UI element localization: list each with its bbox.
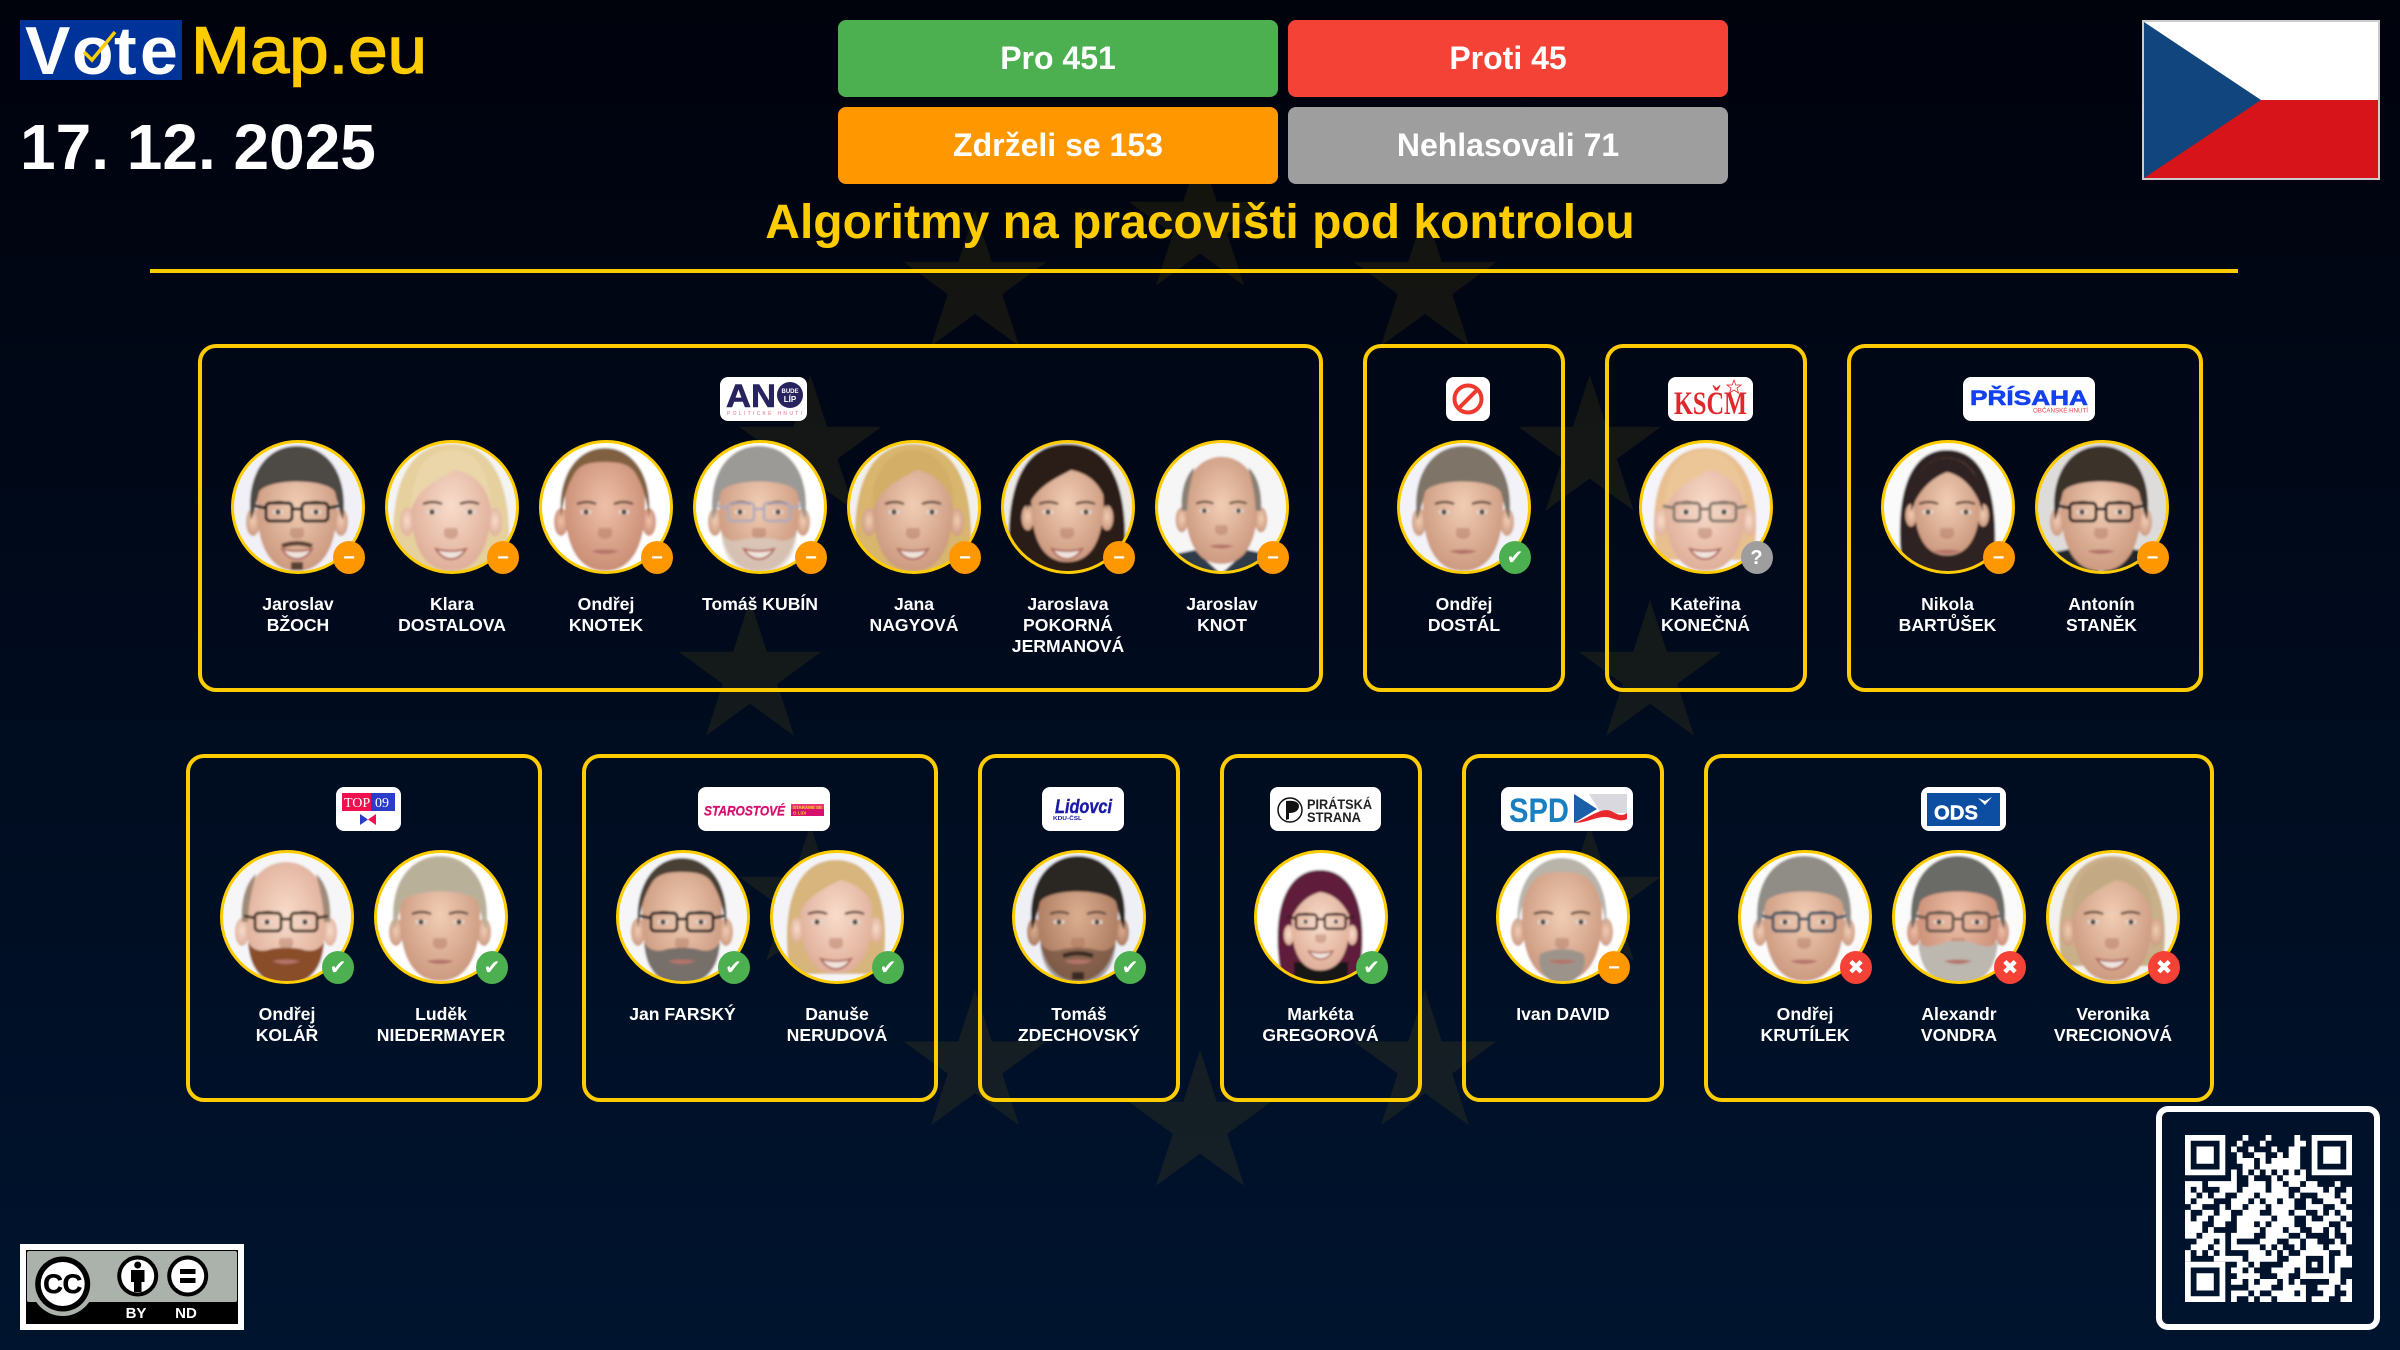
name: Antonín [2068, 594, 2135, 614]
name: Luděk [415, 1004, 467, 1024]
party logo: Lidovci: Lidovci [1055, 797, 1113, 818]
party logo: Pirátská strana: STRANA [1306, 809, 1360, 825]
vote count: not voted: Nehlasovali 71 [1397, 127, 1619, 163]
vote badge: against [1840, 951, 1872, 984]
vote badge: abstain [795, 541, 827, 574]
logo: VoteMap.eu [20, 20, 427, 89]
flag: Czech Republic [2142, 20, 2380, 180]
photo [539, 440, 673, 574]
name: Jaroslava [1027, 594, 1109, 614]
name [1761, 1004, 1850, 1045]
vote badge: abstain: − [1993, 546, 2004, 568]
party logo: TOP 09: TOP [344, 796, 370, 811]
vote count: abstained [838, 107, 1278, 184]
name: Tomáš KUBÍN [702, 594, 818, 614]
party logo: Lidovci: KDU-ČSL [1053, 815, 1083, 822]
photo [1738, 850, 1872, 984]
party logo: STAROSTOVÉ: O LIDI [793, 810, 806, 816]
party logo: ODS [1920, 787, 2006, 831]
photo [1881, 440, 2015, 574]
photo [2046, 850, 2180, 984]
person: Danuše NERUDOVÁ [770, 850, 904, 1045]
QR code [2156, 1106, 2380, 1330]
name [1018, 1004, 1140, 1045]
name: KOLÁŘ [256, 1025, 318, 1045]
vote badge: for [476, 951, 508, 984]
person: Ivan DAVID [1496, 850, 1630, 1024]
name [377, 1004, 505, 1045]
photo [385, 440, 519, 574]
party logo: Lidovci [1042, 787, 1124, 831]
name [262, 594, 334, 635]
person: Nikola BARTŮŠEK [1881, 440, 2015, 635]
name: JERMANOVÁ [1012, 636, 1124, 656]
name: VRECIONOVÁ [2054, 1025, 2172, 1045]
party logo: ANO: POLITICKÉ HNUTÍ [727, 410, 803, 417]
vote count: abstained: Zdrželi se 153 [953, 127, 1163, 163]
title divider [150, 269, 2238, 273]
party logo: ODS: ODS [1934, 802, 1977, 824]
panel: Přísaha [1847, 344, 2203, 692]
photo [1254, 850, 1388, 984]
name: DOSTALOVA [398, 615, 506, 635]
vote badge: for: ✔ [484, 956, 500, 978]
party logo: ANO: BUDE [781, 389, 799, 395]
person: Antonín STANĚK [2035, 440, 2169, 635]
name [1012, 594, 1124, 656]
photo [770, 850, 904, 984]
vote badge: for [1499, 541, 1531, 574]
name: NERUDOVÁ [787, 1025, 887, 1045]
title: Algoritmy na pracovišti pod kontrolou [765, 196, 1635, 248]
party logo: STAROSTOVÉ: STARÁME SE [793, 804, 822, 810]
person: Jan FARSKÝ [616, 850, 750, 1024]
name: NIEDERMAYER [377, 1025, 505, 1045]
panel: KSČM [1605, 344, 1807, 692]
license badge: CC BY-ND: BY [126, 1305, 146, 1322]
photo [220, 850, 354, 984]
vote count: against: Proti 45 [1449, 40, 1567, 76]
name [1899, 594, 1996, 635]
vote badge: for: ✔ [1363, 956, 1380, 978]
photo [1892, 850, 2026, 984]
vote badge: abstain: − [959, 546, 971, 568]
name: Alexandr [1921, 1004, 1997, 1024]
vote badge: for: ✔ [725, 956, 742, 978]
name [256, 1004, 318, 1045]
person: Jaroslava POKORNÁ JERMANOVÁ [1001, 440, 1135, 656]
vote badge: for: ✔ [1122, 956, 1138, 978]
party logo: Přísaha: OBČANSKÉ HNUTÍ [2033, 408, 2088, 414]
license badge: CC BY-ND: CC [43, 1269, 82, 1299]
vote badge: abstain: − [805, 546, 817, 568]
name [870, 594, 958, 635]
name: KNOT [1197, 615, 1247, 635]
vote count: for: Pro 451 [1000, 40, 1116, 76]
vote badge: abstain [949, 541, 981, 574]
party logo: TOP 09: 09 [374, 796, 388, 811]
person: Ondřej DOSTÁL [1397, 440, 1531, 635]
party logo: SPD: SPD [1509, 792, 1569, 830]
vote badge: not voted [1740, 541, 1772, 574]
vote badge: against: ✖ [2002, 956, 2018, 978]
panel: TOP 09 [186, 754, 542, 1102]
photo [1397, 440, 1531, 574]
party logo: Pirátská strana: PIRÁTSKÁ [1306, 796, 1372, 812]
name [2054, 1004, 2172, 1045]
panel: ANO [198, 344, 1323, 692]
name: POKORNÁ [1023, 615, 1113, 635]
person: Alexandr VONDRA [1892, 850, 2026, 1045]
person: Ondřej KNOTEK [539, 440, 673, 635]
vote count: for [838, 20, 1278, 97]
person: Jana NAGYOVÁ [847, 440, 981, 635]
vote badge: abstain: − [1113, 546, 1125, 568]
party logo: Pirátská strana [1270, 787, 1380, 831]
name: KNOTEK [569, 615, 643, 635]
vote badge: abstain [1598, 951, 1630, 984]
vote badge: against [2148, 951, 2180, 984]
vote count: against [1288, 20, 1728, 97]
name: Danuše [805, 1004, 869, 1024]
party logo: non-attached [1446, 377, 1490, 421]
vote badge: abstain: − [651, 546, 663, 568]
vote badge: for [1114, 951, 1146, 984]
name: Ondřej [578, 594, 634, 614]
person: Tomáš KUBÍN [693, 440, 827, 614]
vote badge: abstain [1257, 541, 1289, 574]
name: Jan FARSKÝ [629, 1004, 736, 1024]
panel: Pirátská strana [1220, 754, 1422, 1102]
name: Markéta [1287, 1004, 1354, 1024]
name: ZDECHOVSKÝ [1018, 1025, 1140, 1045]
name: KRUTÍLEK [1761, 1025, 1849, 1045]
name: BŽOCH [267, 615, 329, 635]
person: Markéta GREGOROVÁ [1254, 850, 1388, 1045]
vote badge: abstain: − [1608, 956, 1620, 978]
person: Ondřej KOLÁŘ [220, 850, 354, 1045]
name: Jaroslav [262, 594, 334, 614]
name: NAGYOVÁ [870, 615, 958, 635]
name [1921, 1004, 1997, 1045]
vote badge: for [718, 951, 750, 984]
vote badge: for: ✔ [1507, 546, 1523, 568]
panel: Lidovci [978, 754, 1180, 1102]
vote badge: abstain [1103, 541, 1135, 574]
party logo: STAROSTOVÉ: STAROSTOVÉ [704, 802, 786, 818]
panel: non-attached [1363, 344, 1564, 692]
person: Klara DOSTALOVA [385, 440, 519, 635]
photo [374, 850, 508, 984]
panel: SPD [1462, 754, 1664, 1102]
vote badge: abstain [333, 541, 365, 574]
photo [616, 850, 750, 984]
vote badge: for: ✔ [880, 956, 896, 978]
vote badge: abstain: − [2147, 546, 2158, 568]
person: Luděk NIEDERMAYER [374, 850, 508, 1045]
name [1262, 1004, 1379, 1045]
party logo: ANO [720, 377, 807, 421]
party logo: SPD [1501, 787, 1633, 831]
vote badge: abstain [2136, 541, 2168, 574]
name [1186, 594, 1258, 635]
vote badge: for [1356, 951, 1388, 984]
party logo: ANO: LÍP [784, 395, 797, 404]
vote badge: for [872, 951, 904, 984]
name: DOSTÁL [1428, 615, 1500, 635]
photo [1155, 440, 1289, 574]
photo [231, 440, 365, 574]
person: Ondřej KRUTÍLEK [1738, 850, 1872, 1045]
name: Ondřej [1436, 594, 1492, 614]
name: VONDRA [1921, 1025, 1997, 1045]
photo [847, 440, 981, 574]
name: Klara [430, 594, 474, 614]
party logo: ANO: AN [726, 378, 776, 414]
photo [2035, 440, 2169, 574]
vote badge: against [1994, 951, 2026, 984]
person: Kateřina KONEČNÁ [1639, 440, 1773, 635]
name: Ivan DAVID [1516, 1004, 1610, 1024]
party logo: TOP 09 [336, 787, 400, 831]
name [2066, 594, 2137, 635]
vote badge: abstain: − [1267, 546, 1279, 568]
vote badge: abstain: − [343, 546, 355, 568]
panel: ODS [1704, 754, 2214, 1102]
name: Ondřej [259, 1004, 315, 1024]
photo [1001, 440, 1135, 574]
photo [1639, 440, 1773, 574]
photo [1496, 850, 1630, 984]
person: Jaroslav KNOT [1155, 440, 1289, 635]
vote badge: for: ✔ [330, 956, 346, 978]
name: Nikola [1921, 594, 1974, 614]
person: Jaroslav BŽOCH [231, 440, 365, 635]
name [398, 594, 506, 635]
name: KONEČNÁ [1661, 615, 1750, 635]
name: GREGOROVÁ [1262, 1025, 1379, 1045]
party logo: STAROSTOVÉ [698, 787, 830, 831]
panel: STAROSTOVÉ [582, 754, 938, 1102]
name: BARTŮŠEK [1899, 615, 1996, 635]
vote badge: not voted: ? [1750, 546, 1763, 568]
party logo: Přísaha [1963, 377, 2095, 421]
vote badge: against: ✖ [2156, 956, 2172, 978]
vote badge: against: ✖ [1848, 956, 1864, 978]
name [569, 594, 643, 635]
name: Kateřina [1670, 594, 1741, 614]
person: Veronika VRECIONOVÁ [2046, 850, 2180, 1045]
license badge: CC BY-ND: ND [175, 1305, 197, 1322]
party logo: Přísaha: PŘÍSAHA [1970, 386, 2088, 410]
photo [1012, 850, 1146, 984]
photo [693, 440, 827, 574]
name: STANĚK [2066, 615, 2137, 635]
name: Tomáš [1051, 1004, 1107, 1024]
person: Tomáš ZDECHOVSKÝ [1012, 850, 1146, 1045]
name [1661, 594, 1750, 635]
name: Veronika [2076, 1004, 2150, 1024]
vote badge: abstain [641, 541, 673, 574]
name [787, 1004, 887, 1045]
name [1428, 594, 1500, 635]
name: Jana [894, 594, 934, 614]
vote badge: abstain: − [497, 546, 509, 568]
vote badge: abstain [487, 541, 519, 574]
name: Jaroslav [1186, 594, 1258, 614]
vote badge: abstain [1982, 541, 2014, 574]
vote count: not voted [1288, 107, 1728, 184]
date: 17. 12. 2025 [20, 111, 376, 183]
vote badge: for [322, 951, 354, 984]
license badge: CC BY-ND [20, 1244, 244, 1330]
name: Ondřej [1777, 1004, 1833, 1024]
